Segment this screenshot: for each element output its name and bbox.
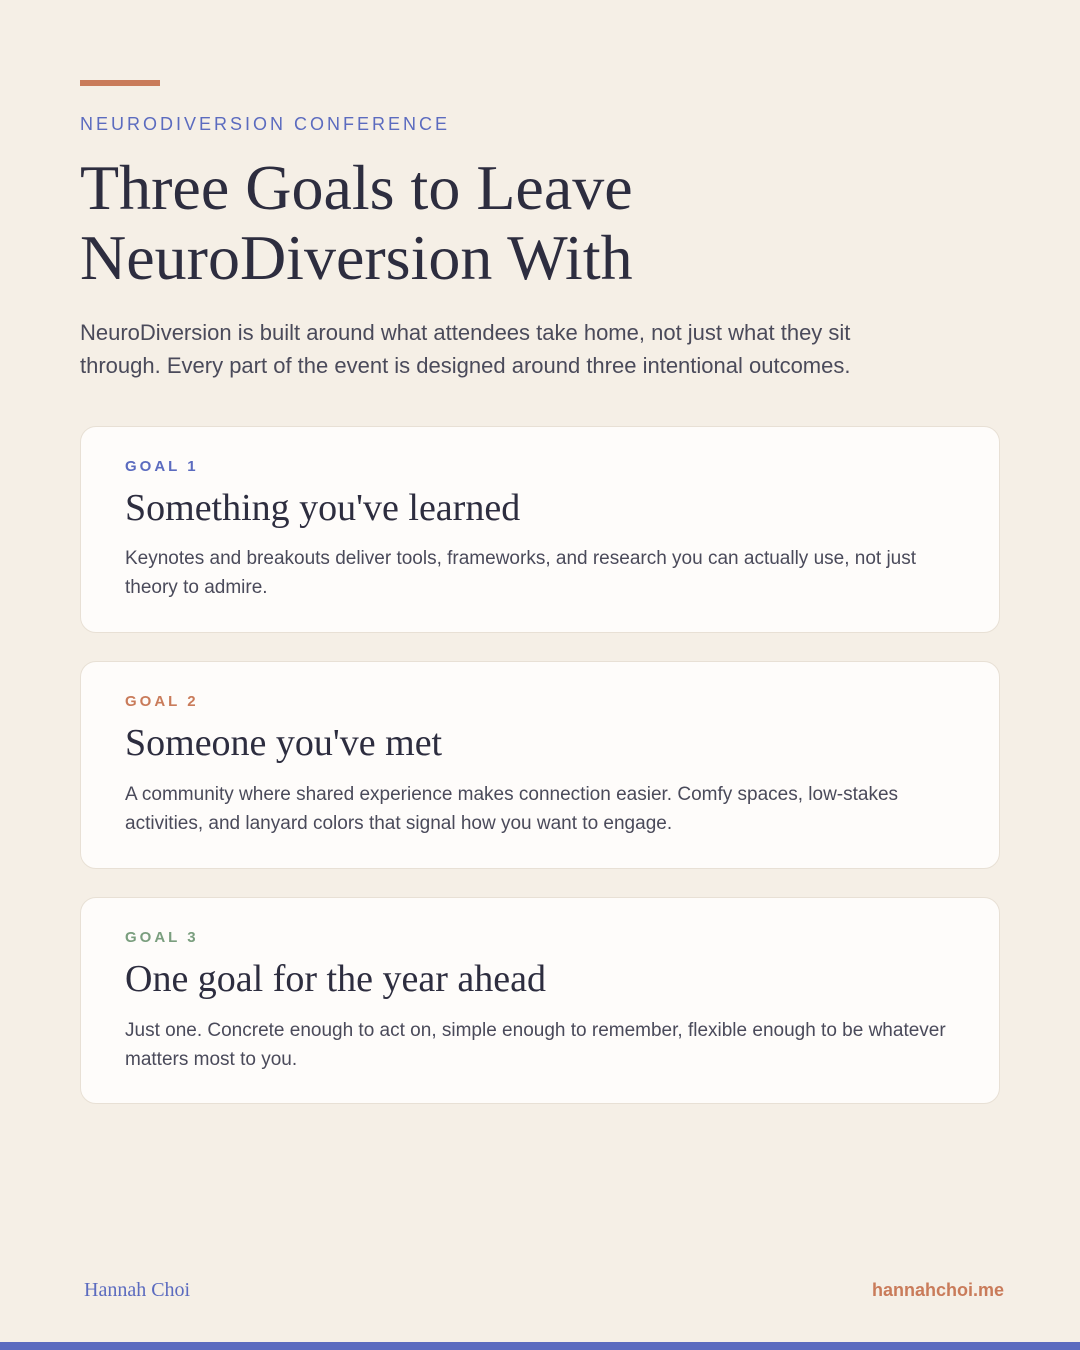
subtitle text: NeuroDiversion is built around what attendees take home, not just what they sit bbox=[80, 320, 850, 345]
subtitle text bbox=[80, 320, 850, 378]
goal 3 description: matters most to you. bbox=[125, 1049, 297, 1070]
goal 3 label: GOAL 3 bbox=[125, 929, 199, 946]
goal 1 description: theory to admire. bbox=[125, 577, 268, 598]
goal 2 label: GOAL 2 bbox=[125, 693, 199, 710]
goal 3 description bbox=[125, 1020, 946, 1070]
goal 1 label: GOAL 1 bbox=[125, 458, 199, 475]
goal 1 description bbox=[125, 548, 916, 598]
title: NeuroDiversion With bbox=[80, 222, 633, 293]
goal 3 description: Just one. Concrete enough to act on, simple enough to remember, flexible enough to be whatever bbox=[125, 1020, 946, 1041]
panel: goal 2 bbox=[80, 661, 1000, 869]
goal 2 heading: Someone you've met bbox=[125, 722, 442, 764]
title bbox=[80, 152, 633, 293]
goal 1 description: Keynotes and breakouts deliver tools, frameworks, and research you can actually use, not just bbox=[125, 548, 916, 569]
panel: goal 3 bbox=[80, 897, 1000, 1104]
bottom bar bbox=[0, 1342, 1080, 1350]
goal 2 description: A community where shared experience makes connection easier. Comfy spaces, low-stakes bbox=[125, 784, 898, 805]
footer author name: Hannah Choi bbox=[84, 1279, 190, 1301]
title: Three Goals to Leave bbox=[80, 152, 633, 223]
subtitle text: through. Every part of the event is designed around three intentional outcomes. bbox=[80, 353, 850, 378]
eyebrow label: NEURODIVERSION CONFERENCE bbox=[80, 114, 450, 134]
goal 3 heading: One goal for the year ahead bbox=[125, 958, 546, 1000]
goal 2 description: activities, and lanyard colors that signal how you want to engage. bbox=[125, 813, 672, 834]
goal 2 description bbox=[125, 784, 898, 834]
goal 1 heading: Something you've learned bbox=[125, 487, 520, 529]
panel: goal 1 bbox=[80, 426, 1000, 633]
footer website: hannahchoi.me bbox=[872, 1280, 1004, 1300]
accent bar bbox=[80, 80, 160, 86]
